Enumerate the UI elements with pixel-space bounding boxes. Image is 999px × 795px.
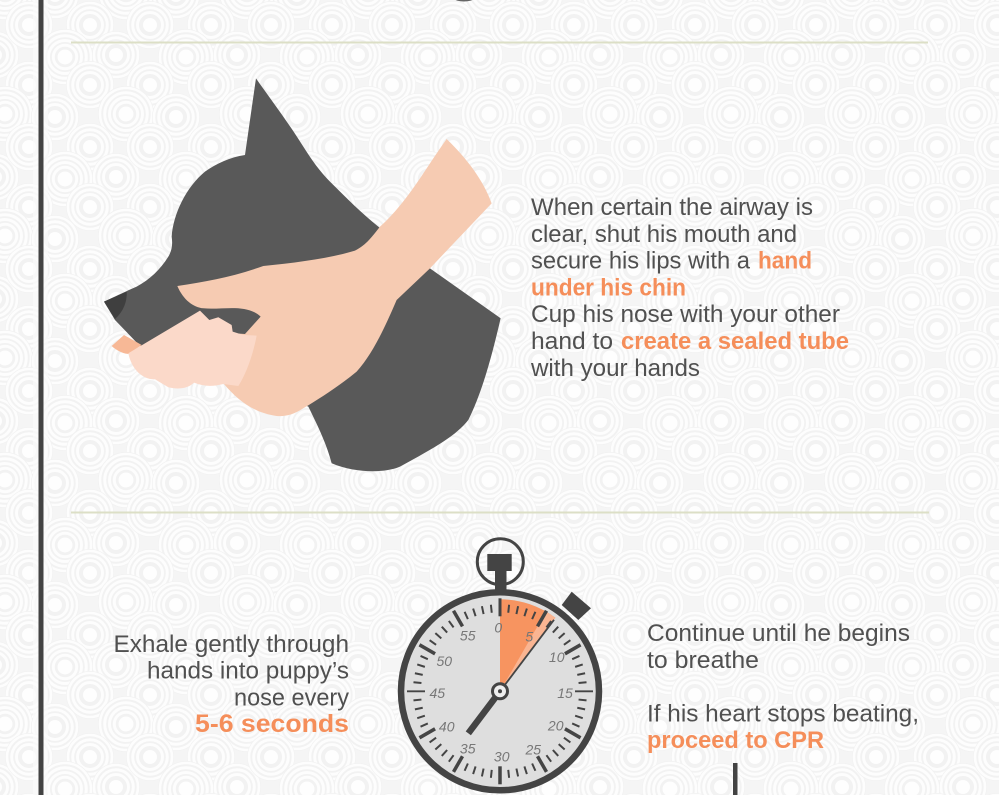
- rear hand and arm: [177, 139, 492, 416]
- text: seal the mouth instructions: hand to: [531, 328, 613, 355]
- text: continue until breathing: to breathe: [647, 647, 759, 674]
- seconds numbers: 15: [557, 685, 573, 701]
- crown ring: [477, 539, 523, 585]
- seconds numbers: [430, 620, 573, 764]
- tongue: [112, 335, 142, 354]
- seconds numbers: 55: [460, 628, 476, 644]
- text: exhale gently: nose every: [234, 684, 349, 712]
- text: seal the mouth instructions: clear, shut his mouth and: [531, 221, 797, 248]
- text: continue until breathing: [647, 620, 919, 754]
- seconds numbers: 35: [460, 740, 476, 756]
- illustration: hands sealing dog's muzzle: [104, 78, 501, 471]
- timeline bar left: [33, 0, 48, 795]
- seconds numbers: 45: [430, 685, 445, 701]
- seconds numbers: 25: [525, 742, 541, 758]
- text: seal the mouth instructions: hand: [758, 248, 812, 274]
- text: continue until breathing: If his heart stops beating,: [647, 700, 919, 728]
- seconds numbers: 0: [494, 620, 502, 636]
- seconds numbers: 10: [549, 649, 565, 665]
- elapsed wedge: [500, 599, 555, 691]
- sweep hand: [468, 620, 554, 733]
- connector line to next step: [733, 763, 738, 795]
- text: exhale gently: hands into puppy’s: [147, 658, 349, 684]
- crown button: [487, 554, 512, 571]
- text: continue until breathing: proceed to CPR: [647, 727, 824, 754]
- seconds numbers: 50: [437, 653, 452, 669]
- wedge highlight: [500, 612, 555, 691]
- text: seal the mouth instructions: When certain the airway is: [531, 194, 813, 221]
- seconds numbers: 5: [525, 628, 533, 644]
- text: exhale gently: 5-6 seconds: [195, 710, 349, 738]
- center hub: [492, 684, 508, 699]
- top fragment of previous icon: [455, 0, 473, 2]
- text: exhale gently: Exhale gently through: [114, 631, 349, 658]
- seconds numbers: 20: [547, 718, 564, 734]
- watch face: [401, 592, 599, 790]
- tick marks: [407, 598, 593, 784]
- dog head silhouette: [104, 78, 501, 471]
- front hand cupping nose: [128, 311, 257, 389]
- crown stem: [495, 570, 506, 590]
- text: seal the mouth instructions: secure his lips with a: [531, 248, 751, 274]
- stopwatch: [401, 539, 599, 790]
- text: seal the mouth instructions: [530, 194, 849, 382]
- text: seal the mouth instructions: Cup his nose with your other: [531, 301, 840, 328]
- text: seal the mouth instructions: create a sealed tube: [621, 328, 849, 355]
- text: seal the mouth instructions: with your hands: [530, 355, 700, 382]
- side button: [556, 592, 591, 625]
- text: exhale gently: [114, 631, 349, 738]
- text: seal the mouth instructions: under his chin: [531, 274, 686, 302]
- seconds numbers: 40: [439, 718, 455, 734]
- seconds numbers: 30: [494, 748, 510, 764]
- text: continue until breathing: Continue until he begins: [647, 620, 910, 647]
- dog nose: [104, 292, 127, 319]
